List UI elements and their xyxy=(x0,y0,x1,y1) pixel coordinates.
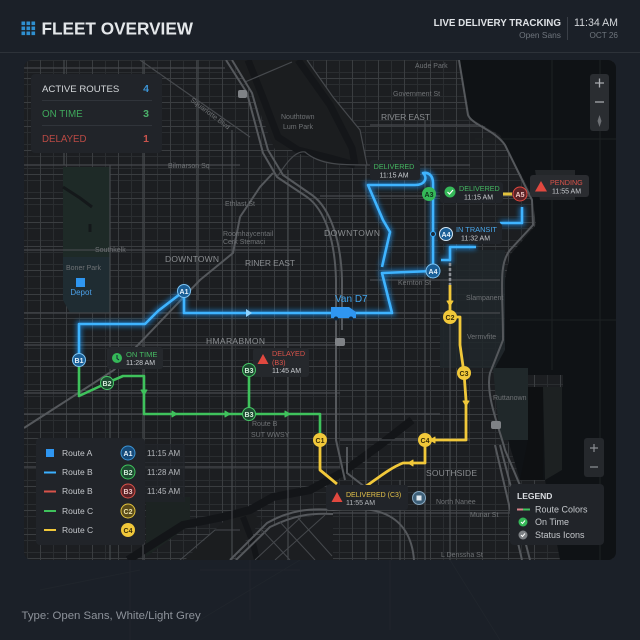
map place labels: SOUTHSIDE xyxy=(426,468,477,478)
callout: delayed xyxy=(253,348,309,377)
map street labels: Roomhaycentail xyxy=(223,231,274,238)
node A1 xyxy=(178,284,190,298)
callout: delivered C3: 11:55 AM xyxy=(346,500,375,507)
badge B3: B3 xyxy=(124,489,133,496)
status icons: Status Icons xyxy=(535,530,585,540)
node A4 xyxy=(426,264,440,278)
van xyxy=(331,294,368,320)
map street labels: Southkelk xyxy=(95,247,126,254)
badge B3 xyxy=(121,484,181,498)
route C green row: Route C xyxy=(62,506,93,516)
park pond xyxy=(63,187,92,232)
title: FLEET OVERVIEW xyxy=(42,18,194,38)
node C2 xyxy=(443,310,457,324)
callout: delivered A3: 11:15 AM xyxy=(464,194,493,202)
parks xyxy=(63,167,528,440)
badge C2 xyxy=(121,504,135,518)
delayed: DELAYED xyxy=(42,134,87,145)
route B blue row: Route B xyxy=(62,467,93,477)
clock date: OCT 26 xyxy=(589,31,618,40)
type note: Type: Open Sans, White/Light Grey xyxy=(22,610,201,622)
node C4 xyxy=(418,433,432,447)
active routes: ACTIVE ROUTES xyxy=(42,84,119,95)
callout: delivered top: 11:15 AM xyxy=(379,172,409,180)
node C4: C4 xyxy=(421,438,430,445)
callout: pending: 11:55 AM xyxy=(552,188,581,196)
highways xyxy=(24,60,533,560)
node A3: A3 xyxy=(425,192,434,199)
major roads xyxy=(24,60,530,560)
map street labels: North Nanee xyxy=(436,499,476,506)
node A5 xyxy=(513,187,527,201)
route colors: Route Colors xyxy=(535,504,588,514)
node B3 xyxy=(242,408,256,420)
node A3 xyxy=(422,187,436,201)
node C3 xyxy=(457,366,471,380)
node B3 top: B3 xyxy=(245,368,254,375)
route A row: Route A xyxy=(62,448,93,458)
map street labels: SUT WWSY xyxy=(251,432,290,439)
callout: delayed: DELAYED xyxy=(272,349,305,358)
callout: in transit xyxy=(438,223,502,244)
footer faint map xyxy=(40,560,500,640)
node A5: A5 xyxy=(516,192,525,199)
route C yellow row: Route C xyxy=(62,525,93,535)
depot: Depot xyxy=(70,288,92,297)
lake grid lines xyxy=(475,60,616,560)
callout: in transit: IN TRANSIT xyxy=(456,225,497,234)
map street labels: Squarlotte Blvd xyxy=(189,97,231,131)
map street labels: Boner Park xyxy=(66,265,102,272)
map street labels: Ethlast St xyxy=(225,201,255,208)
badge B2: B2 xyxy=(124,470,133,477)
map place labels: RIVER EAST xyxy=(381,112,430,122)
route arrow xyxy=(246,309,252,317)
node A4: A4 xyxy=(429,269,438,276)
map place labels: RINER EAST xyxy=(245,258,295,268)
pier inlet xyxy=(520,387,543,480)
header xyxy=(0,17,640,52)
map place labels: DOWNTOWN xyxy=(324,228,380,238)
route C yellow xyxy=(320,285,469,487)
callout: delayed: (B3) xyxy=(272,358,286,367)
river branch xyxy=(243,517,257,560)
zoom controls bottom xyxy=(584,438,604,477)
callout: delivered A3 xyxy=(440,182,503,203)
route B blue row xyxy=(44,467,93,477)
panel: legend xyxy=(510,484,604,545)
marker: stop xyxy=(412,492,426,504)
north park zone xyxy=(232,60,367,165)
node B1: B1 xyxy=(75,358,84,365)
route glow xyxy=(79,173,522,360)
node B2: B2 xyxy=(103,381,112,388)
badge B2: 11:28 AM xyxy=(147,468,181,477)
value 1: 1 xyxy=(143,133,149,145)
callout: delayed: 11:45 AM xyxy=(272,368,301,375)
badge C4: C4 xyxy=(124,528,133,535)
map xyxy=(24,60,640,560)
map street labels: Vermvfite xyxy=(467,334,496,341)
map street labels: Ruttanown xyxy=(493,395,527,402)
badge A1: 11:15 AM xyxy=(147,449,181,458)
map street labels: Government St xyxy=(393,91,440,98)
badge A1: A1 xyxy=(124,451,133,458)
node C2: C2 xyxy=(446,315,455,322)
font note: Open Sans xyxy=(519,30,561,40)
callout: on time: ON TIME xyxy=(126,350,158,359)
map street labels: Kernton St xyxy=(398,280,431,287)
badge A1 xyxy=(121,446,181,460)
badge C4 xyxy=(121,523,135,537)
panel: route legend xyxy=(36,438,185,545)
legend title: LEGEND xyxy=(517,491,552,501)
route C yellow row xyxy=(44,525,93,535)
map street labels: L Denssha St xyxy=(441,552,483,559)
panel: route stats xyxy=(31,74,162,153)
map place labels xyxy=(165,112,477,478)
land block xyxy=(535,170,575,200)
node A4 transit xyxy=(440,228,452,240)
node B2 xyxy=(100,376,114,390)
map street labels: Cerk Stemaci xyxy=(223,239,265,246)
node C1: C1 xyxy=(316,438,325,445)
grey dashed link xyxy=(449,263,451,285)
yellow link xyxy=(503,192,512,196)
subtitle: LIVE DELIVERY TRACKING xyxy=(434,18,561,29)
pier xyxy=(543,387,562,480)
lake xyxy=(460,60,616,560)
callout: pending xyxy=(530,175,589,197)
node B1 xyxy=(72,354,86,366)
node C1 xyxy=(313,433,327,447)
north river xyxy=(292,150,354,168)
node A1: A1 xyxy=(180,289,189,296)
route B red row: Route B xyxy=(62,486,93,496)
callout: in transit: 11:32 AM xyxy=(461,236,490,242)
node A4 transit: A4 xyxy=(442,232,451,239)
south river xyxy=(128,420,412,560)
zoom controls top xyxy=(590,74,609,131)
waypoint xyxy=(430,232,436,236)
map place labels: DOWNTOWN xyxy=(165,254,219,264)
callout: delivered C3: DELIVERED (C3) xyxy=(346,492,401,499)
route B blue xyxy=(79,173,522,360)
clock time: 11:34 AM xyxy=(574,17,618,29)
depot xyxy=(70,278,92,297)
route A row xyxy=(46,448,93,458)
map street labels: Munar St xyxy=(470,512,498,519)
map street labels: Bilmarson Sq xyxy=(168,163,210,170)
icon: grid logo xyxy=(22,22,35,35)
callout: delivered top xyxy=(370,160,420,180)
highway shields xyxy=(238,90,501,429)
route C green row xyxy=(44,506,93,516)
south diagonal streets xyxy=(180,515,332,560)
on time: ON TIME xyxy=(42,109,83,120)
van label: Van D7 xyxy=(335,294,368,305)
badge B2 xyxy=(121,465,181,479)
route C green xyxy=(78,366,322,434)
node C3: C3 xyxy=(460,371,469,378)
value 4: 4 xyxy=(143,83,149,95)
callout: pending: PENDING xyxy=(550,178,583,187)
map street labels: Lum Park xyxy=(283,124,313,131)
badge C2: C2 xyxy=(124,509,133,516)
badge B3: 11:45 AM xyxy=(147,487,181,496)
callout: delivered top: DELIVERED xyxy=(374,162,414,171)
map street labels: Slampanent xyxy=(466,295,503,302)
map street labels: Nouthtown xyxy=(281,114,315,121)
value 3: 3 xyxy=(143,108,149,120)
callout: delivered A3: DELIVERED xyxy=(459,184,500,193)
route B red row xyxy=(44,486,93,496)
map street labels xyxy=(66,63,527,559)
map street labels: Route B xyxy=(252,421,278,428)
node B3 top xyxy=(242,364,256,376)
map street labels: Aude Park xyxy=(415,63,448,70)
map place labels: HMARABMON xyxy=(206,336,265,346)
callout: on time xyxy=(107,347,163,369)
south zones xyxy=(146,497,190,557)
node B3: B3 xyxy=(245,412,254,419)
callout: on time: 11:28 AM xyxy=(126,360,155,367)
callout: delivered C3 xyxy=(326,485,408,510)
on time: On Time xyxy=(535,517,569,527)
